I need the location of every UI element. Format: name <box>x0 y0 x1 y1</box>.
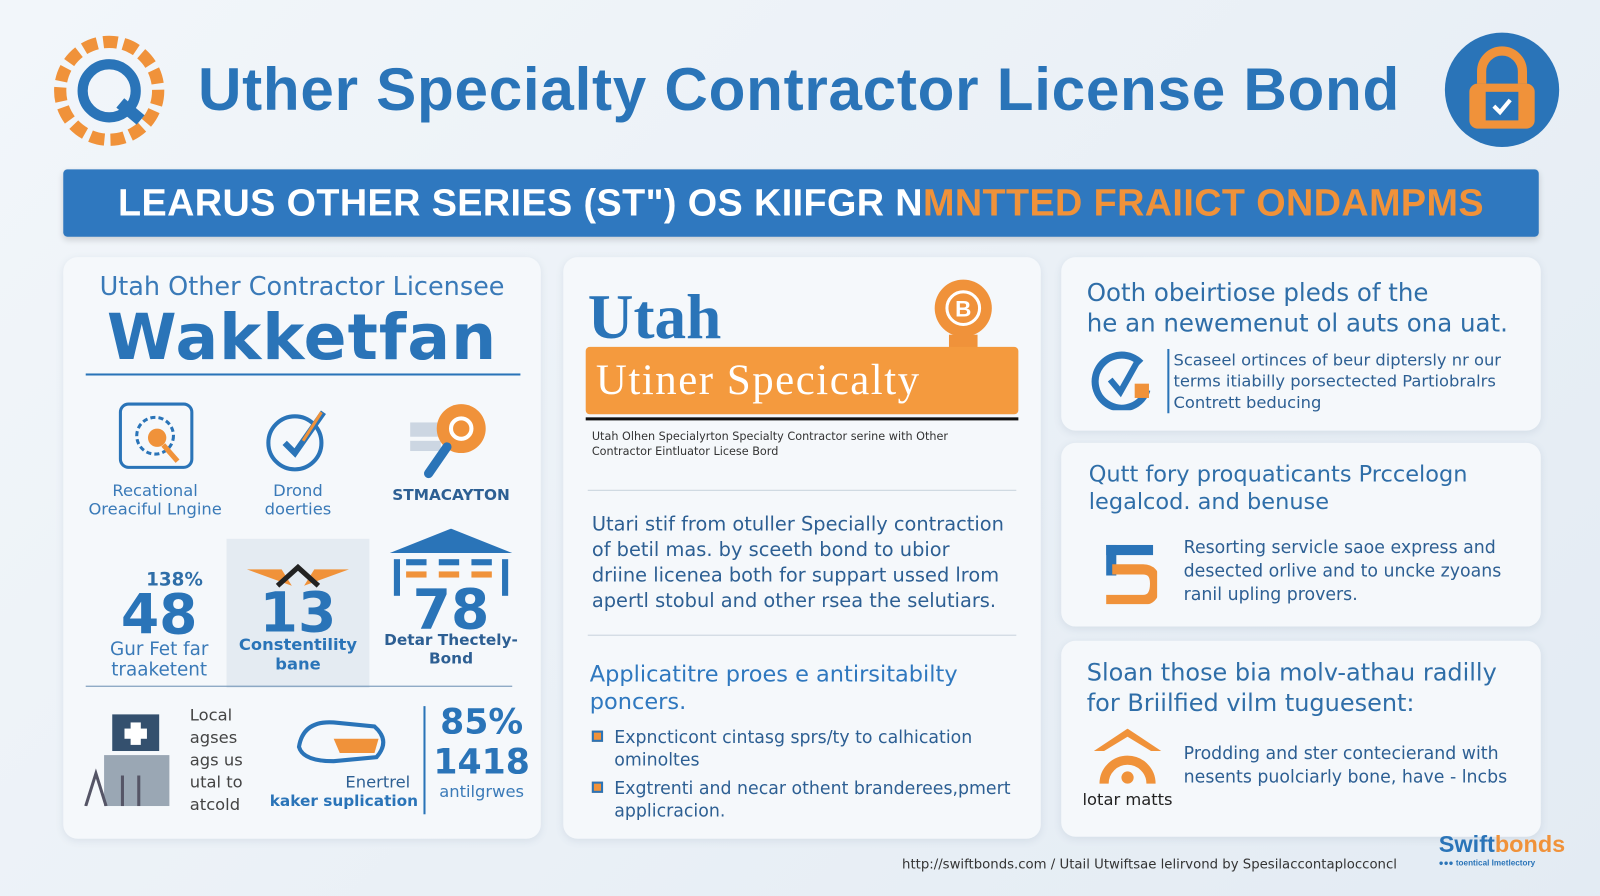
orange label <box>586 347 1018 414</box>
icon item 3 <box>392 404 510 504</box>
icon: house: lotar matts <box>1083 790 1173 809</box>
text: nesents puolciarly bone, have - lncbs <box>1184 767 1507 788</box>
icon item 2 <box>265 410 331 518</box>
text: local <box>190 705 243 814</box>
text: terms itiabilly porsectected Partiobralrs <box>1173 371 1496 391</box>
heading big: Wakketfan <box>107 300 497 374</box>
icon item 3: STMACAYTON <box>392 486 510 504</box>
heading application: poncers. <box>590 690 686 715</box>
panel: middle <box>563 257 1041 839</box>
text: desected orlive and to uncke zyoans <box>1184 561 1501 582</box>
text: Scaseel ortinces of beur diptersly nr our <box>1173 350 1501 369</box>
stat 48: traaketent <box>111 659 207 681</box>
stat 48: 48 <box>121 583 198 647</box>
icon: handshake <box>270 720 418 810</box>
icon: badge B: B <box>955 296 971 321</box>
stat 13 <box>227 539 369 688</box>
heading: Ooth obeirtiose pleds of the <box>1087 279 1428 307</box>
text: ranil upling provers. <box>1184 585 1358 605</box>
stat 78: Bond <box>429 649 473 667</box>
footer url: http://swiftbonds.com / Utail Utwiftsae lelirvond by Spesilaccontaplocconcl <box>902 857 1397 872</box>
icon item 1: Recational <box>112 481 198 500</box>
paragraph <box>592 513 1004 612</box>
bullet list <box>592 728 1011 821</box>
subtext: Contractor Eintluator Licese Bord <box>592 445 778 458</box>
subtext <box>592 430 948 458</box>
heading: Sloan those bia molv-athau radilly <box>1087 658 1497 687</box>
text: Prodding and ster contecierand with <box>1184 744 1499 764</box>
stat 85% <box>433 702 530 801</box>
text <box>1184 538 1501 605</box>
heading <box>1087 279 1508 338</box>
bullet list: applicracion. <box>614 801 725 821</box>
panel: right card 2 <box>1061 443 1541 627</box>
text: local: agses <box>190 728 237 747</box>
bullet list: ominoltes <box>614 750 700 770</box>
subtext: Utah Olhen Specialyrton Specialty Contractor serine with Other <box>592 430 948 443</box>
bullet list: Expncticont cintasg sprs/ty to calhication <box>614 728 972 748</box>
stat 78: 78 <box>413 578 489 642</box>
text: Resorting servicle saoe express and <box>1184 538 1496 558</box>
heading: for Briilfied vilm tuguesent: <box>1087 689 1415 717</box>
stat 85%: 1418 <box>433 742 530 783</box>
stat 78: Detar Thectely- <box>384 631 518 649</box>
heading: he an newemenut ol auts ona uat. <box>1087 309 1508 338</box>
icon: check <box>1092 352 1150 410</box>
footer logo: Swiftbonds <box>1439 831 1565 857</box>
stat 48: Gur Fet far <box>110 639 208 660</box>
text <box>1184 744 1507 788</box>
text: local: atcold <box>190 795 240 814</box>
icon item 1: Oreaciful Lngine <box>88 499 222 518</box>
heading: Qutt fory proquaticants Prccelogn <box>1089 462 1467 488</box>
icon: building <box>84 714 170 806</box>
icon item 2: doerties <box>265 499 331 518</box>
icon: badge B <box>934 280 992 347</box>
stat 48: 138% <box>146 569 203 591</box>
stat 13: bane <box>275 654 321 673</box>
banner: LEARUS OTHER SERIES (ST") OS KIIFGR NMNTTED FRAIICT ONDAMPMS <box>118 182 1484 223</box>
heading Utah: Utah <box>588 283 721 352</box>
stat 85%: 85% <box>440 702 523 743</box>
stat 13: Constentility <box>239 635 357 654</box>
orange label: Utiner Specicalty <box>596 357 921 404</box>
icon: house <box>1083 728 1173 809</box>
panel: left <box>63 257 541 839</box>
panel: right card 1 <box>1061 257 1541 431</box>
logo left <box>54 36 164 146</box>
bullet list: Exgtrenti and necar othent branderees,pmert <box>614 779 1011 799</box>
heading <box>1087 658 1497 717</box>
paragraph: of betil mas. by sceeth bond to ubior <box>592 539 950 561</box>
icon item 1 <box>88 402 222 518</box>
title: Uther Specialty Contractor License Bond <box>198 56 1400 123</box>
icon: handshake: kaker suplication <box>270 792 418 810</box>
heading application: Applicatitre proes e antirsitabilty <box>590 662 958 688</box>
stat 78 <box>384 528 518 667</box>
text: Contrett beducing <box>1173 393 1321 412</box>
text: local: utal to <box>190 772 243 792</box>
text: local: Local <box>190 705 232 724</box>
icon item 2: Drond <box>273 481 323 500</box>
icon: 5 <box>1106 544 1158 604</box>
icon: handshake: Enertrel <box>345 772 410 792</box>
icon: lock badge <box>1444 32 1560 147</box>
paragraph: Utari stif from otuller Specially contraction <box>592 513 1004 536</box>
stat 13: 13 <box>260 581 336 645</box>
heading application <box>590 662 958 715</box>
heading <box>1089 462 1467 515</box>
paragraph: apertl stobul and other rsea the selutiars. <box>592 590 996 612</box>
heading: legalcod. and benuse <box>1089 490 1329 515</box>
text: local: ags us <box>190 750 243 769</box>
stat 85%: antilgrwes <box>439 782 524 801</box>
text <box>1167 349 1501 413</box>
banner <box>63 169 1539 237</box>
paragraph: driine licenea both for suppart ussed lrom <box>592 564 999 587</box>
panel: right card 3 <box>1061 641 1541 837</box>
footer logo: ●●● toentical Imetlectory <box>1439 858 1535 867</box>
stat 48 <box>110 569 208 681</box>
heading: Utah Other Contractor Licensee <box>100 271 505 301</box>
